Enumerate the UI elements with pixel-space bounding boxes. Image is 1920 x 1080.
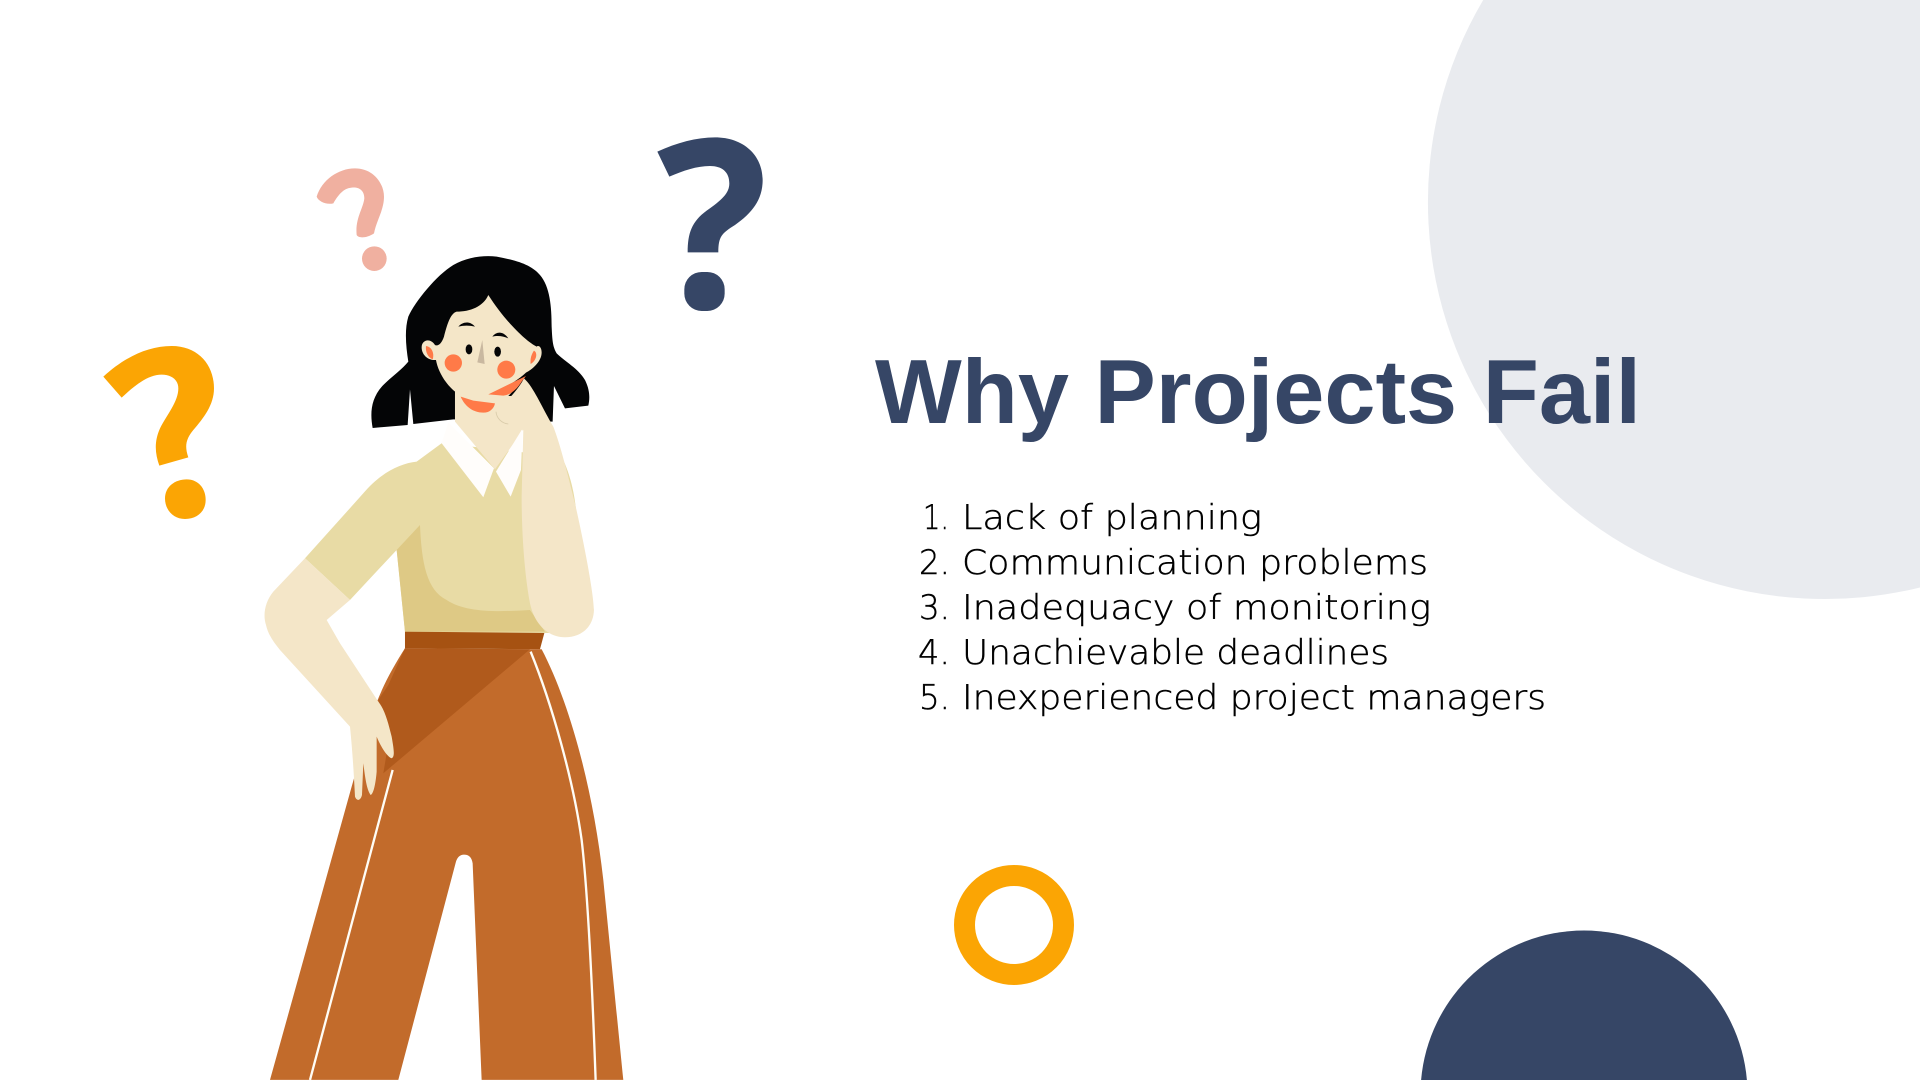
item 4: 4. bbox=[918, 633, 950, 673]
trouser side stripes bbox=[310, 652, 596, 1080]
item 2: Communication problems bbox=[962, 543, 1428, 583]
belt bbox=[405, 631, 545, 649]
navy half circle bbox=[1421, 930, 1747, 1080]
item 5: Inexperienced project managers bbox=[962, 678, 1546, 718]
trousers dark fold bbox=[378, 648, 530, 773]
icon: orange question mark bbox=[103, 346, 214, 519]
eyebrows bbox=[458, 323, 475, 327]
item 1: Lack of planning bbox=[962, 498, 1262, 538]
raised arm and hand bbox=[496, 378, 594, 637]
background grey circle bbox=[1428, 0, 1920, 599]
item 3: 3. bbox=[919, 588, 950, 628]
item 4: Unachievable deadlines bbox=[962, 633, 1389, 673]
hip arm and hand bbox=[265, 558, 394, 800]
nose bbox=[477, 340, 485, 364]
jaw shadow bbox=[508, 378, 525, 396]
neck bbox=[455, 390, 523, 469]
hair bbox=[371, 256, 589, 428]
cheeks bbox=[445, 354, 462, 372]
ears bbox=[426, 346, 433, 359]
orange ring bbox=[964, 876, 1064, 974]
list of reasons bbox=[918, 498, 1546, 718]
icon: navy question mark bbox=[657, 137, 763, 311]
illustration: thinking woman bbox=[265, 256, 623, 1080]
face bbox=[422, 295, 542, 395]
sweater bbox=[305, 443, 577, 633]
item 5: 5. bbox=[919, 678, 950, 718]
item 3: Inadequacy of monitoring bbox=[962, 588, 1431, 628]
sweater shadow bbox=[397, 525, 545, 632]
item 2: 2. bbox=[919, 543, 950, 583]
item 1: 1. bbox=[923, 498, 949, 538]
neck shadow bbox=[461, 397, 495, 413]
title: Why Projects Fail bbox=[875, 342, 1641, 443]
collar bbox=[442, 423, 494, 497]
eyes bbox=[466, 344, 472, 354]
icon: pink question mark bbox=[317, 168, 387, 271]
trousers bbox=[270, 648, 623, 1080]
